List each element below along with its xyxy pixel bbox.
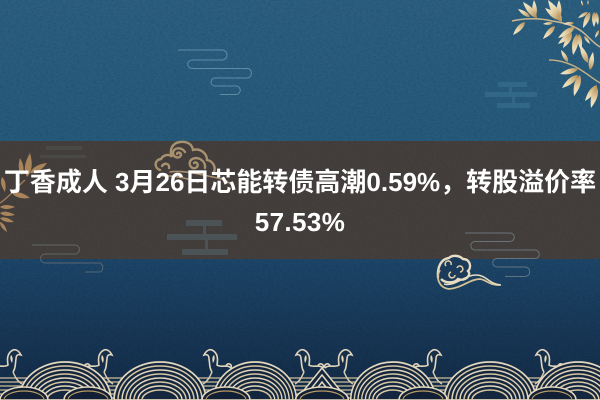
faint seal mark: top right (485, 82, 537, 108)
title line two: 57.53% (255, 207, 345, 237)
faint cloud line: band right (465, 233, 539, 276)
wave crests (0, 350, 563, 384)
faint seal mark: band centre (167, 220, 237, 255)
large wave arcs (19, 362, 600, 400)
faint seal mark: band left (40, 146, 86, 158)
cloud: band centre (156, 142, 232, 185)
small foreground arcs (0, 387, 576, 400)
bamboo: top right (511, 0, 600, 109)
dark title band (0, 141, 600, 259)
faint cloud line: top (178, 50, 251, 94)
ocean wave border (0, 350, 600, 400)
ornate cloud: lower right (438, 256, 501, 289)
bamboo: band left (0, 153, 48, 233)
wave connecting lines (0, 378, 600, 398)
faint cloud line: band left (32, 245, 103, 272)
title line one: 丁香成人 3月26日芯能转债高潮0.59%，转股溢价率 (4, 167, 596, 197)
